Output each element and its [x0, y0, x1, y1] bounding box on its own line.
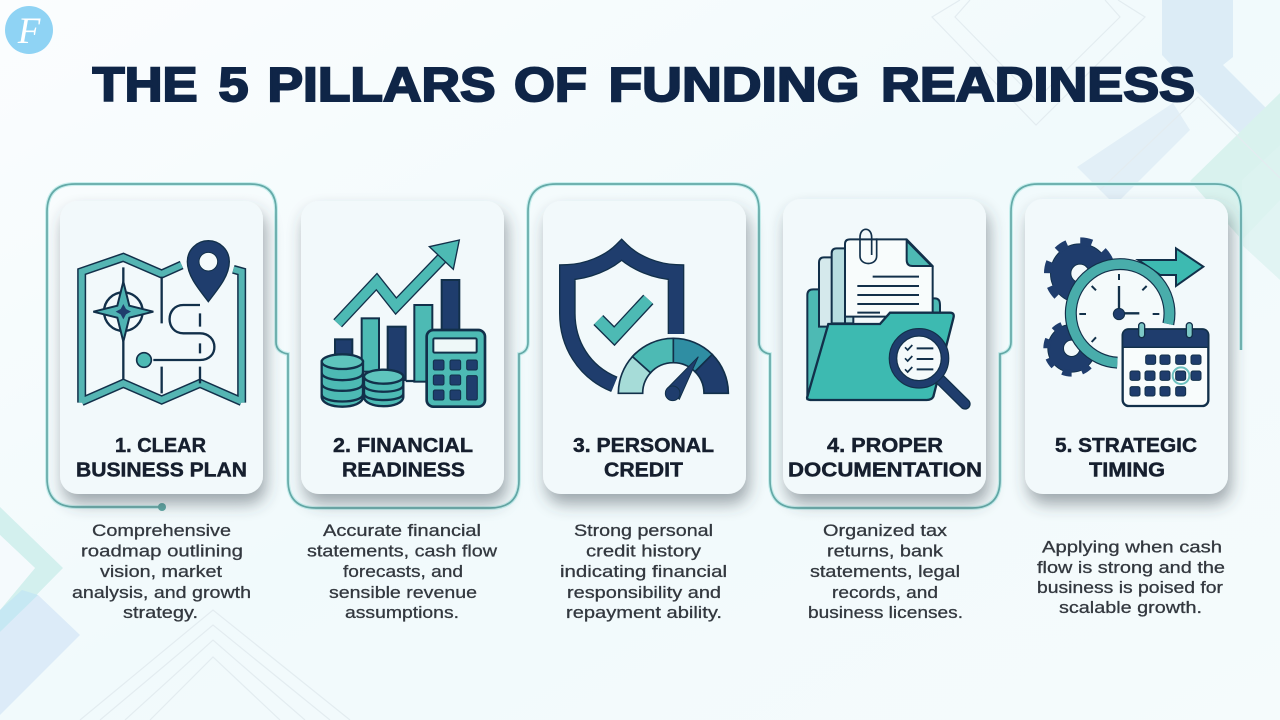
description 5 — [1037, 539, 1225, 617]
logo — [5, 6, 53, 54]
description 4: statements, legal — [810, 563, 960, 581]
description 3: Strong personal — [574, 522, 713, 540]
description 2: assumptions. — [345, 604, 459, 622]
card 3 background — [543, 201, 746, 494]
heading 3: 3. PERSONAL — [573, 435, 714, 457]
icon: map with compass and pin — [82, 241, 242, 403]
heading 4: DOCUMENTATION — [788, 460, 982, 482]
description 1 — [72, 522, 251, 622]
title: 5 — [218, 59, 248, 112]
heading 5 — [1055, 435, 1197, 482]
heading 2: 2. FINANCIAL — [333, 435, 473, 457]
panel: strategic timing — [1025, 199, 1228, 617]
title — [92, 59, 1195, 112]
description 1: analysis, and growth — [72, 584, 251, 602]
connector line — [47, 184, 1241, 511]
card 4 background — [783, 199, 986, 494]
icon: folder, documents and magnifier — [807, 229, 965, 404]
description 4: Organized tax — [823, 522, 948, 540]
description 1: roadmap outlining — [81, 543, 243, 561]
description 2 — [307, 522, 497, 622]
description 5: Applying when cash — [1042, 539, 1222, 557]
description 3: responsibility and — [567, 584, 721, 602]
heading 4 — [788, 435, 982, 482]
title: READINESS — [881, 59, 1195, 112]
description 3 — [560, 522, 727, 622]
heading 3: CREDIT — [604, 460, 683, 482]
heading 5: 5. STRATEGIC — [1055, 435, 1197, 457]
description 2: forecasts, and — [343, 563, 463, 581]
description 1: Comprehensive — [92, 522, 231, 540]
logo: F — [17, 11, 41, 52]
heading 1: 1. CLEAR — [115, 435, 207, 457]
description 4: business licenses. — [808, 604, 963, 622]
heading 4: 4. PROPER — [827, 435, 944, 457]
description 1: vision, market — [100, 563, 222, 581]
card 5 background — [1025, 199, 1228, 494]
description 2: sensible revenue — [329, 584, 477, 602]
description 2: Accurate financial — [323, 522, 481, 540]
description 4: returns, bank — [827, 543, 944, 561]
panel: personal credit — [543, 201, 746, 622]
panel: proper documentation — [783, 199, 986, 622]
heading 2 — [333, 435, 473, 482]
description 2: statements, cash flow — [307, 543, 497, 561]
heading 1: BUSINESS PLAN — [76, 460, 247, 482]
description 4 — [808, 522, 963, 622]
heading 5: TIMING — [1089, 460, 1165, 482]
title: FUNDING — [608, 59, 860, 112]
description 4: records, and — [832, 584, 938, 602]
heading 3 — [573, 435, 714, 482]
description 1: strategy. — [123, 604, 198, 622]
description 3: indicating financial — [560, 563, 727, 581]
title: OF — [514, 59, 587, 112]
description 3: credit history — [586, 543, 702, 561]
description 5: scalable growth. — [1059, 599, 1202, 617]
panel: clear business plan — [60, 201, 263, 622]
card 2 background — [301, 201, 504, 494]
title: THE — [92, 59, 198, 112]
title: PILLARS — [268, 59, 496, 112]
heading 1 — [76, 435, 247, 482]
description 3: repayment ability. — [566, 604, 722, 622]
panel: financial readiness — [301, 201, 504, 622]
description 5: business is poised for — [1037, 579, 1224, 597]
icon: gears, clock, arrow and calendar — [1047, 241, 1208, 406]
card 1 background — [60, 201, 263, 494]
heading 2: READINESS — [342, 460, 465, 482]
icon: shield with check and gauge — [567, 250, 728, 401]
description 5: flow is strong and the — [1037, 559, 1225, 577]
icon: growth chart, coins and calculator — [322, 240, 485, 407]
